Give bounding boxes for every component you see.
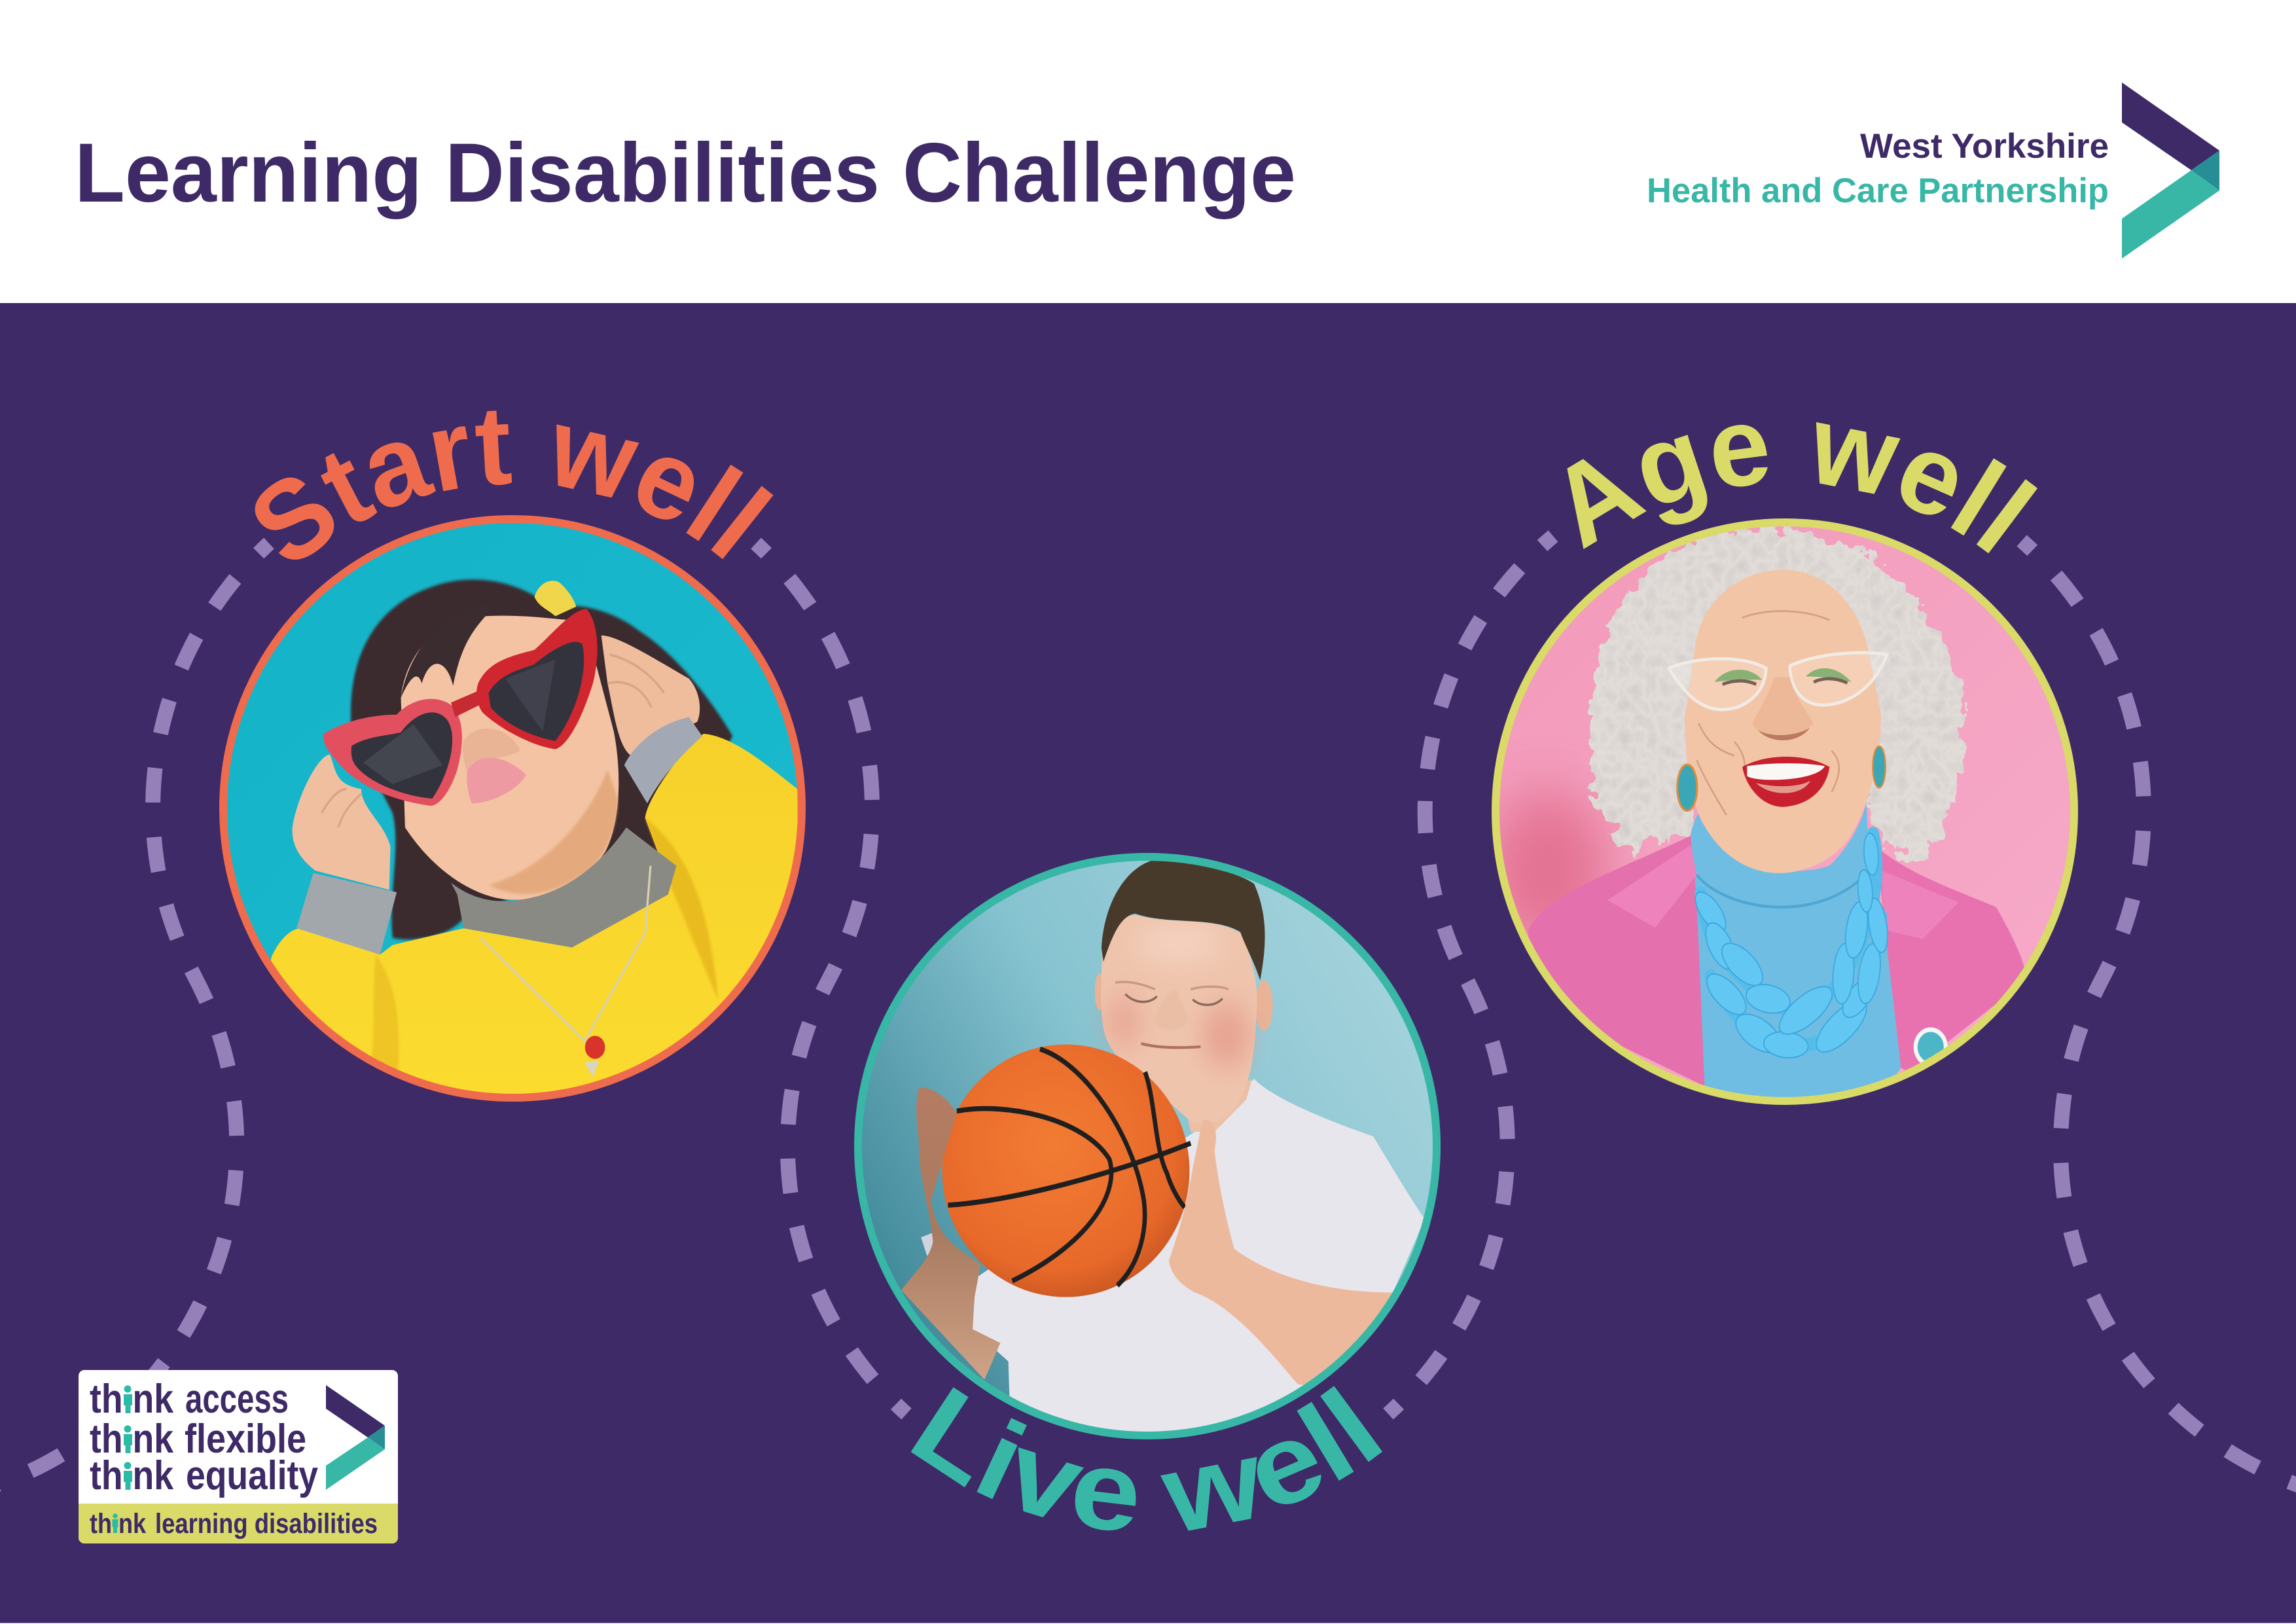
lapels bbox=[1607, 845, 1696, 928]
right jacket bbox=[1877, 847, 2026, 1072]
eyes, nose, mouth bbox=[1115, 982, 1229, 1047]
title: Learning Disabilities Challenge bbox=[75, 126, 1296, 220]
badge line: think access: think bbox=[90, 1377, 173, 1422]
heading: Start well: Start well bbox=[255, 410, 774, 560]
turtleneck bbox=[1691, 801, 1901, 1113]
nose bbox=[1752, 677, 1814, 738]
badge line: think equality bbox=[90, 1453, 318, 1498]
badge white panel bbox=[79, 1370, 398, 1543]
chin shade bbox=[488, 770, 618, 894]
badge line: think flexible: flexible bbox=[185, 1416, 306, 1462]
background shadow bbox=[1488, 792, 1607, 948]
neck bbox=[1187, 1079, 1252, 1132]
badge chevron bbox=[326, 1385, 385, 1490]
eyes bbox=[1723, 679, 1848, 684]
ring: Age well photo bbox=[1496, 522, 2074, 1101]
logo chevron bbox=[2122, 82, 2219, 259]
nose and lips bbox=[463, 729, 520, 774]
left hand bbox=[293, 755, 391, 890]
eyeshadow bbox=[1715, 670, 1762, 682]
left cuff bbox=[296, 873, 397, 954]
face bbox=[1101, 915, 1257, 1124]
face bbox=[401, 616, 619, 900]
logo text: Health and Care Partnership: Health and Care Partnership bbox=[1647, 171, 2109, 210]
ears bbox=[1095, 973, 1104, 1010]
t-shirt bbox=[973, 1079, 1424, 1432]
basketball seams bbox=[948, 1049, 1191, 1286]
chunky chain necklace bbox=[1690, 833, 1891, 1060]
badge line: think flexible: think bbox=[90, 1416, 173, 1462]
right hand bbox=[601, 636, 700, 755]
badge line: think access: access bbox=[185, 1377, 289, 1422]
glasses bbox=[1669, 653, 1887, 710]
necklace bbox=[480, 866, 651, 1041]
brooch bbox=[1916, 1030, 1946, 1064]
badge line: think equality: equality bbox=[186, 1453, 318, 1498]
wrinkles bbox=[1696, 611, 1839, 815]
earrings bbox=[1677, 765, 1697, 810]
collar fold bbox=[1696, 871, 1869, 907]
right lens bbox=[476, 609, 598, 749]
badge: think learning disabilities bbox=[79, 1370, 398, 1543]
logo text: West Yorkshire: West Yorkshire bbox=[1860, 127, 2109, 166]
right cuff bbox=[624, 717, 702, 803]
photo: Start well, child with heart sunglasses bbox=[227, 523, 798, 1094]
badge line: think learning disabilities bbox=[90, 1508, 378, 1540]
photo: Age well, smiling older woman bbox=[1473, 484, 2094, 1113]
badge line: think flexible bbox=[90, 1416, 306, 1462]
heading: Live well: Live well bbox=[911, 1386, 1382, 1530]
badge line: think learning disabilities: learning disabilities bbox=[155, 1508, 378, 1540]
badge line: think access bbox=[90, 1377, 289, 1422]
ring: Start well photo bbox=[223, 519, 802, 1098]
right hand and arm bbox=[1169, 1120, 1460, 1389]
partnership logo bbox=[1647, 82, 2219, 259]
face bbox=[1685, 569, 1881, 873]
hair bow bbox=[535, 581, 576, 616]
fringe bbox=[401, 616, 486, 698]
photo: Live well, young man with basketball bbox=[862, 861, 1433, 1432]
left jacket bbox=[1528, 836, 1704, 1086]
left hand and arm bbox=[901, 1088, 1000, 1380]
collar bbox=[451, 827, 676, 947]
cheeks bbox=[1202, 1003, 1250, 1068]
bridge bbox=[451, 691, 479, 717]
badge line: think learning disabilities: think bbox=[90, 1508, 146, 1540]
yellow sweatshirt bbox=[271, 734, 798, 1094]
heading: Age well: Age well bbox=[1567, 422, 2037, 554]
hair bbox=[1102, 861, 1265, 980]
badge line: think equality: think bbox=[90, 1453, 173, 1498]
hair bbox=[1590, 527, 1965, 857]
badge olive band bbox=[79, 1504, 398, 1543]
hair bbox=[351, 579, 733, 939]
ring: Live well photo bbox=[858, 857, 1437, 1435]
mouth bbox=[1742, 757, 1829, 807]
left lens bbox=[323, 699, 462, 806]
basketball bbox=[942, 1045, 1189, 1297]
dashed route line around the three circles bbox=[0, 536, 2296, 1487]
